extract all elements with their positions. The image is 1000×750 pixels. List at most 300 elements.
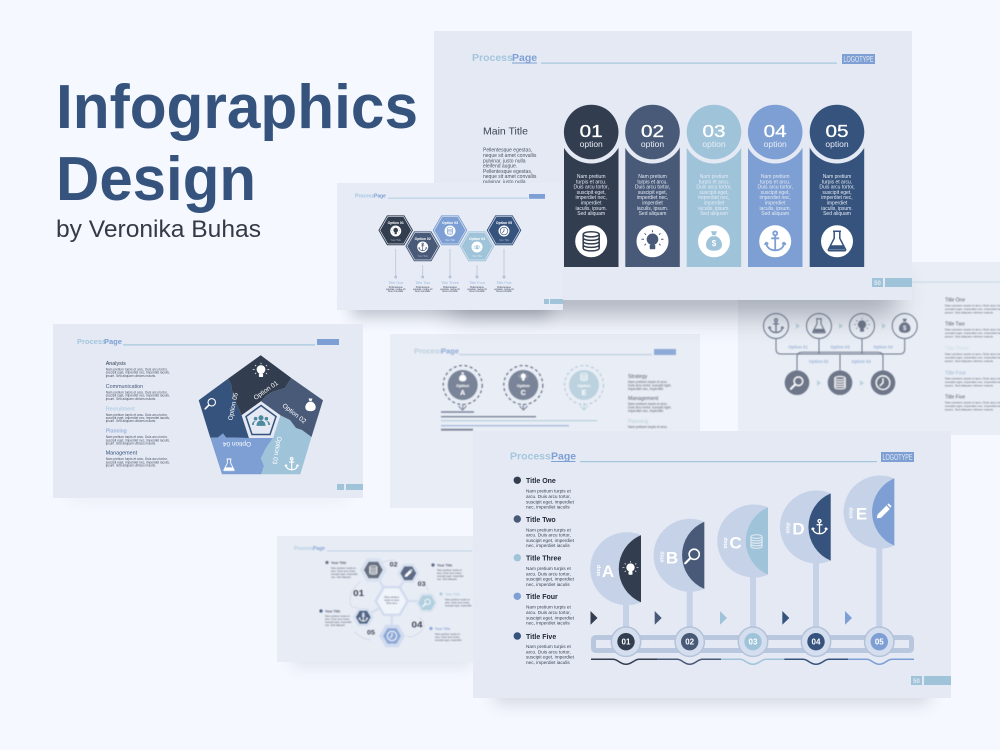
header: process page: Process [77, 337, 106, 346]
column 01: imperdiet nec, [575, 195, 607, 201]
title list: suscipit eget, imperdiet [526, 615, 575, 620]
header: process page: Page [374, 194, 386, 200]
hexagon 01 [378, 215, 413, 245]
column 03: iaculis, ipsum. [698, 206, 730, 212]
column 01: Duis arcu tortor, [574, 185, 609, 191]
callout texts: suscipit eget, imperdiet [435, 638, 462, 642]
column 01: suscipit eget, [577, 190, 606, 196]
header: process page: Page [313, 546, 325, 552]
column 03: Nam pretium [700, 174, 728, 180]
header: process page: Process [510, 450, 551, 462]
faded slide: options timeline [390, 334, 700, 508]
option labels: Option 01 [788, 344, 808, 350]
hexagon 04 [379, 625, 405, 647]
segment labels: Option 03 [271, 436, 282, 465]
left text list: ipsum. Sed aliquam ultrices mauris. [106, 442, 156, 446]
bottom icon row [785, 370, 895, 395]
column 03: imperdiet [704, 200, 725, 206]
option A circle: A [460, 390, 465, 397]
legend text: Duis arcu tortor, suscipit eget, [628, 406, 672, 410]
legend text: imperdiet nec, imperdiet [628, 387, 663, 391]
callout texts: arcu. Duis arcu tortor, [325, 617, 350, 621]
option labels: Option 02 [809, 359, 829, 364]
right column text: ipsum. Sed aliquam ultrices mauris. [945, 334, 994, 338]
intro text: neque sit amet convallis [483, 153, 537, 159]
intro text: pulvinar, justo nulla [483, 158, 526, 164]
slide: five option columns [434, 31, 912, 314]
hexagon captions: Pellentesque [470, 286, 485, 289]
intro text: Pellentesque egestas, [483, 148, 532, 154]
callout texts: Nam pretium turpis et [445, 598, 470, 602]
column 05: turpis et arcu. [822, 179, 852, 185]
hexagon captions: amet convallis [415, 290, 431, 293]
left text list: suscipit eget, imperdiet nec, imperdiet iaculis, [106, 416, 170, 420]
hexagon captions: Title One [388, 281, 403, 285]
step numbers: 04 [412, 620, 423, 630]
right column text: ipsum. Sed aliquam ultrices mauris. [945, 359, 994, 363]
number nodes: 02 [685, 638, 695, 647]
header: process page [414, 346, 676, 356]
column 01: imperdiet [581, 200, 602, 206]
segment labels: Option 04 [223, 440, 251, 447]
column 01: Nam pretium [577, 174, 606, 180]
column 03: 03 [702, 121, 726, 141]
left text list: Nam pretium turpis et arcu. Duis arcu tortor, [106, 435, 168, 439]
hexagon 05: Option 05 [496, 221, 512, 225]
hexagon captions: amet convallis [388, 290, 404, 293]
option C circle: C [521, 390, 526, 397]
central hexagon [376, 587, 408, 615]
title list: suscipit eget, imperdiet [526, 499, 575, 504]
legend text: imperdiet nec, imperdiet [628, 409, 663, 413]
left text list: Nam pretium turpis et arcu. Duis arcu tortor, [106, 368, 168, 372]
timeline bars [441, 403, 597, 430]
left text list: ipsum. Sed aliquam ultrices mauris. [106, 374, 156, 378]
page number [911, 676, 951, 685]
hexagon captions: Title Two [415, 281, 430, 285]
left text list: Nam pretium turpis et arcu. Duis arcu tortor, [106, 457, 168, 461]
leader lines [395, 249, 505, 278]
column 02: Nam pretium [638, 174, 667, 180]
column 05: Nam pretium [823, 174, 851, 180]
right column text: Title Two [945, 322, 965, 328]
hexagon captions: Title Five [496, 281, 512, 285]
left text list: Planning [106, 429, 127, 435]
column 05: imperdiet nec, [821, 195, 853, 201]
header: process page: Process [355, 194, 375, 200]
column 03: Sed aliquam [700, 211, 728, 217]
dashed arcs [350, 560, 428, 640]
callout texts: nec. Sed aliquam [325, 623, 345, 627]
hexagon 03 [433, 215, 467, 245]
left text list: Nam pretium turpis et arcu. Duis arcu tortor, [106, 413, 168, 417]
hexagon captions: Title Three [441, 281, 459, 285]
step B: step [660, 551, 666, 563]
title list: Title Three [526, 556, 561, 562]
right column text: Title Three [945, 346, 969, 352]
option labels: Option 04 [851, 359, 871, 364]
hexagon 05 [353, 608, 374, 626]
left text list: Analysis [106, 361, 126, 367]
central hexagon: Nam pretium [384, 595, 399, 599]
hexagon 02: Option 02 [415, 237, 431, 241]
title list: nec, imperdiet iaculis [526, 660, 570, 665]
header: process page [294, 546, 472, 552]
logotype: LOGOTYPE [844, 55, 874, 64]
title list: arcu. Duis arcu tortor, [526, 533, 571, 538]
step chevrons [796, 323, 886, 386]
title list: Title One [526, 478, 556, 485]
callout texts: suscipit eget, imperdiet [437, 574, 464, 578]
number nodes: 05 [875, 638, 884, 647]
segment labels [223, 380, 307, 465]
option A circle: Option [456, 383, 470, 388]
step numbers: 02 [390, 562, 398, 568]
title list: arcu. Duis arcu tortor, [526, 494, 571, 499]
hexagon 02: Your Title [418, 255, 428, 258]
right column text: Title One [945, 298, 965, 304]
option labels [788, 344, 893, 364]
header: process page: Process [472, 52, 513, 64]
hexagon captions: amet convallis [442, 290, 458, 293]
legend text: Nam pretium turpis et arcu. [628, 402, 668, 406]
page number [544, 299, 563, 304]
callout texts: suscipit eget, imperdiet [331, 572, 358, 576]
title list: Nam pretium turpis et [526, 489, 572, 494]
title list: nec, imperdiet iaculis [526, 543, 570, 548]
connector lines [776, 338, 905, 370]
callout texts: arcu. Duis arcu tortor, [445, 600, 470, 604]
hexagon captions: amet convallis [469, 290, 485, 293]
intro text: neque sit amet convallis [483, 174, 537, 180]
title list: nec, imperdiet iaculis [526, 505, 570, 510]
header: process page: Process [294, 546, 314, 552]
step B: B [666, 548, 678, 568]
hexagon captions [386, 281, 514, 293]
left text list: ipsum. Sed aliquam ultrices mauris. [106, 397, 156, 401]
title list: suscipit eget, imperdiet [526, 538, 575, 543]
column 01: iaculis, ipsum. [575, 206, 607, 212]
callout texts: arcu. Duis arcu tortor, [435, 635, 460, 639]
step D: step [786, 522, 792, 534]
segment labels: Option 02 [281, 402, 307, 425]
column 01: turpis et arcu. [576, 179, 606, 185]
title list: arcu. Duis arcu tortor, [526, 610, 571, 615]
header rule [912, 282, 1000, 283]
hexagon 03: Option 03 [442, 221, 458, 225]
callout texts: Nam pretium turpis et [325, 614, 350, 618]
central hexagon: Duis arcu [386, 601, 398, 605]
hexagon 04: Option 04 [469, 237, 485, 241]
title list: arcu. Duis arcu tortor, [526, 649, 571, 654]
option E circle: E [582, 390, 587, 397]
callout texts: Your Title [437, 564, 452, 568]
column 04: suscipit eget, [761, 190, 790, 196]
column 05: 05 [826, 121, 848, 141]
step A: A [602, 562, 614, 581]
title list [514, 477, 575, 665]
slide: hexagon options [337, 183, 563, 316]
main title: Main Title [483, 126, 528, 138]
column 02: 02 [641, 121, 664, 141]
network connectors [363, 570, 427, 636]
title list: Nam pretium turpis et [526, 527, 572, 532]
title list: Nam pretium turpis et [526, 605, 572, 610]
column 04: Duis arcu tortor, [758, 185, 793, 191]
column 02: Sed aliquam [639, 211, 666, 217]
hexagon captions: egestas, neque sit [440, 288, 460, 291]
column 04: imperdiet [765, 200, 786, 206]
legend text: Planning [628, 419, 648, 425]
step numbers: 01 [353, 588, 365, 598]
legend text: Management [628, 396, 659, 402]
option A circle [443, 366, 482, 404]
hexagon captions: egestas, neque sit [494, 288, 514, 291]
header: process page: Page [104, 337, 122, 346]
left text list [106, 361, 170, 468]
header: process page: Process [414, 346, 443, 356]
callout texts: Nam pretium turpis et [437, 568, 462, 572]
step A: step [596, 564, 602, 576]
right column text: ipsum. Sed aliquam ultrices mauris. [945, 384, 994, 388]
right column text: ipsum. Sed aliquam ultrices mauris. [945, 310, 994, 314]
hexagon captions: Title Four [469, 281, 486, 285]
hexagon 03: Your Title [445, 239, 456, 242]
title list: suscipit eget, imperdiet [526, 655, 575, 660]
header: process page [510, 450, 877, 462]
header: process page: Page [512, 52, 537, 64]
hexagon 03 [416, 593, 438, 612]
option C circle: Option [517, 383, 530, 388]
logotype [842, 54, 875, 64]
column 02: suscipit eget, [638, 190, 667, 196]
intro text: Pellentesque egestas, [483, 169, 532, 175]
column 03: imperdiet nec, [698, 195, 730, 201]
column 05: option [825, 139, 849, 149]
header: process page [355, 194, 545, 200]
column 02: turpis et arcu. [637, 179, 668, 185]
step numbers: 03 [418, 582, 426, 588]
callout texts: Nam pretium turpis et [331, 566, 356, 570]
hexagon 05 [487, 215, 521, 245]
column 03: Duis arcu tortor, [696, 185, 732, 191]
column 03: option [702, 139, 726, 149]
title list: suscipit eget, imperdiet [526, 577, 575, 582]
column 04: imperdiet nec, [759, 195, 791, 201]
column 05: Duis arcu tortor, [819, 185, 855, 191]
callout texts: arcu. Duis arcu tortor, [437, 571, 462, 575]
column 05: suscipit eget, [822, 190, 852, 196]
subtitle: by Veronika Buhas [56, 216, 261, 243]
callout texts: Your Title [445, 592, 460, 596]
column 01: Sed aliquam [577, 211, 605, 217]
hexagon captions: egestas, neque sit [386, 288, 406, 291]
step A [590, 532, 641, 605]
header: process page: Page [441, 346, 459, 356]
wave underline [591, 659, 914, 664]
intro text [483, 148, 537, 186]
column 04: option [764, 139, 787, 149]
track [594, 638, 912, 650]
top icon row [764, 314, 917, 338]
left text list: ipsum. Sed aliquam ultrices mauris. [106, 419, 156, 423]
callout texts: arcu. Duis arcu tortor, [331, 569, 356, 573]
column 05: iaculis, ipsum. [821, 206, 853, 212]
legend text [628, 374, 672, 429]
right column text [945, 298, 1000, 412]
legend text: Strategy [628, 374, 648, 380]
column 02: Duis arcu tortor, [635, 185, 670, 191]
right column text: ipsum. Sed aliquam ultrices mauris. [945, 408, 994, 412]
callout texts: Your Title [325, 610, 340, 614]
top icon row: $ [903, 326, 907, 332]
intro text: pulvinar, justo nulla [483, 180, 526, 186]
left text list: suscipit eget, imperdiet nec, imperdiet iaculis, [106, 460, 170, 464]
column 03: turpis et arcu. [699, 179, 729, 185]
hexagon captions: Pellentesque [497, 286, 512, 289]
logotype [881, 452, 914, 462]
segment labels: Option 05 [227, 392, 240, 421]
step E [844, 475, 894, 548]
callout texts: nec. Sed aliquam [331, 575, 351, 579]
column 01: 01 [580, 121, 603, 141]
title list: Title Two [526, 517, 556, 524]
column 02: imperdiet nec, [637, 195, 668, 201]
left text list: Communication [106, 384, 143, 390]
option E circle [564, 366, 604, 404]
option labels: Option 04 [873, 344, 893, 350]
right column text: Title Five [945, 394, 965, 400]
title: Design [56, 145, 256, 214]
hexagon captions: Pellentesque [389, 286, 403, 289]
slide: stepped crescent timeline [473, 431, 951, 704]
faded slide: connected icon rows [738, 262, 1000, 435]
step C [717, 504, 768, 578]
logotype: LOGOTYPE [882, 453, 912, 462]
callout texts: nec. Sed aliquam [437, 577, 457, 581]
segment icons [205, 363, 316, 471]
hexagon captions: amet convallis [496, 290, 512, 293]
stems [623, 546, 882, 630]
number nodes: 03 [749, 638, 758, 647]
column 04: Nam pretium [761, 174, 790, 180]
column 05: Sed aliquam [823, 211, 851, 217]
callout texts: Your Title [331, 561, 346, 565]
step E: E [856, 504, 867, 524]
hexagon 05: Your Title [499, 239, 510, 242]
column 01 [560, 100, 623, 267]
hexagon captions: egestas, neque sit [467, 288, 487, 291]
callout texts [319, 561, 472, 642]
header: process page: Page [551, 450, 576, 462]
hexagon 02 [397, 564, 419, 583]
column 02: iaculis, ipsum. [637, 206, 668, 212]
left text list: Recruitment [106, 406, 135, 412]
option C circle [504, 366, 543, 404]
slide: pentagon diagram [53, 324, 363, 500]
left text list: suscipit eget, imperdiet nec, imperdiet iaculis, [106, 394, 170, 398]
column 05: imperdiet [827, 200, 848, 206]
column 03: suscipit eget, [699, 190, 729, 196]
left text list: Management [106, 451, 138, 457]
hexagon captions: Pellentesque [443, 286, 458, 289]
hexagon captions: egestas, neque sit [413, 288, 433, 291]
step numbers [353, 562, 426, 636]
option labels: Option 03 [830, 344, 850, 350]
column 04 [744, 100, 807, 267]
column 02: imperdiet [642, 200, 663, 206]
callout texts: Your Title [435, 627, 450, 631]
left text list: suscipit eget, imperdiet nec, imperdiet iaculis, [106, 438, 170, 442]
step D: D [792, 520, 805, 538]
callout texts: Nam pretium turpis et [435, 632, 460, 636]
column 04: Sed aliquam [761, 211, 789, 217]
hexagon 02 [405, 231, 440, 261]
hexagon 04: Your Title [472, 255, 483, 258]
step C: step [723, 537, 729, 549]
column 03 [682, 100, 746, 267]
page number: 50 [913, 679, 920, 685]
title list: Title Four [526, 594, 558, 601]
title list: Nam pretium turpis et [526, 566, 572, 571]
number nodes: 01 [622, 638, 631, 647]
column 02 [621, 100, 684, 267]
legend text: Nam pretium turpis et arcu. [628, 380, 668, 384]
faded slide: hexagon network [277, 536, 487, 666]
title list: Title Five [526, 634, 556, 641]
hexagon captions: Pellentesque [416, 286, 430, 289]
hexagon 04 [460, 231, 494, 261]
left text list: Nam pretium turpis et arcu. Duis arcu tortor, [106, 390, 168, 394]
hexagon 01: Option 01 [388, 221, 404, 225]
pentagon center emblem [242, 401, 280, 438]
callout texts: suscipit eget, imperdiet [445, 604, 472, 608]
hexagon 01: Your Title [391, 239, 401, 242]
column 03: $ [712, 239, 717, 248]
title list: Nam pretium turpis et [526, 644, 572, 649]
column 04: 04 [764, 121, 787, 141]
title list: arcu. Duis arcu tortor, [526, 571, 571, 576]
callout texts: suscipit eget, imperdiet [325, 620, 352, 624]
page number [872, 278, 912, 287]
step numbers: 05 [367, 630, 376, 636]
step E: step [848, 507, 854, 519]
central hexagon: turpis et arcu [384, 598, 400, 602]
header: process page [472, 52, 837, 64]
intro text: eleifend augue. [483, 164, 517, 170]
column 02: option [641, 139, 664, 149]
column 04: turpis et arcu. [760, 179, 790, 185]
step C: C [729, 534, 742, 552]
column 01: option [580, 139, 603, 149]
legend text: Nam pretium turpis et arcu. [628, 425, 668, 429]
option E circle: Option [578, 383, 591, 388]
title: Infographics [56, 73, 418, 142]
header: process page [77, 337, 339, 346]
page number: 50 [874, 281, 881, 287]
pentagon segments [199, 355, 323, 474]
arrows [590, 611, 852, 625]
number nodes [611, 627, 894, 656]
left text list: suscipit eget, imperdiet nec, imperdiet iaculis, [106, 371, 170, 375]
column 05 [806, 100, 868, 267]
segment labels: Option 01 [253, 380, 280, 402]
column 04: iaculis, ipsum. [759, 206, 791, 212]
legend text: Duis arcu tortor, suscipit eget, [628, 384, 672, 388]
right column text: Title Four [945, 370, 966, 376]
page number [337, 484, 363, 490]
title list: nec, imperdiet iaculis [526, 582, 570, 587]
